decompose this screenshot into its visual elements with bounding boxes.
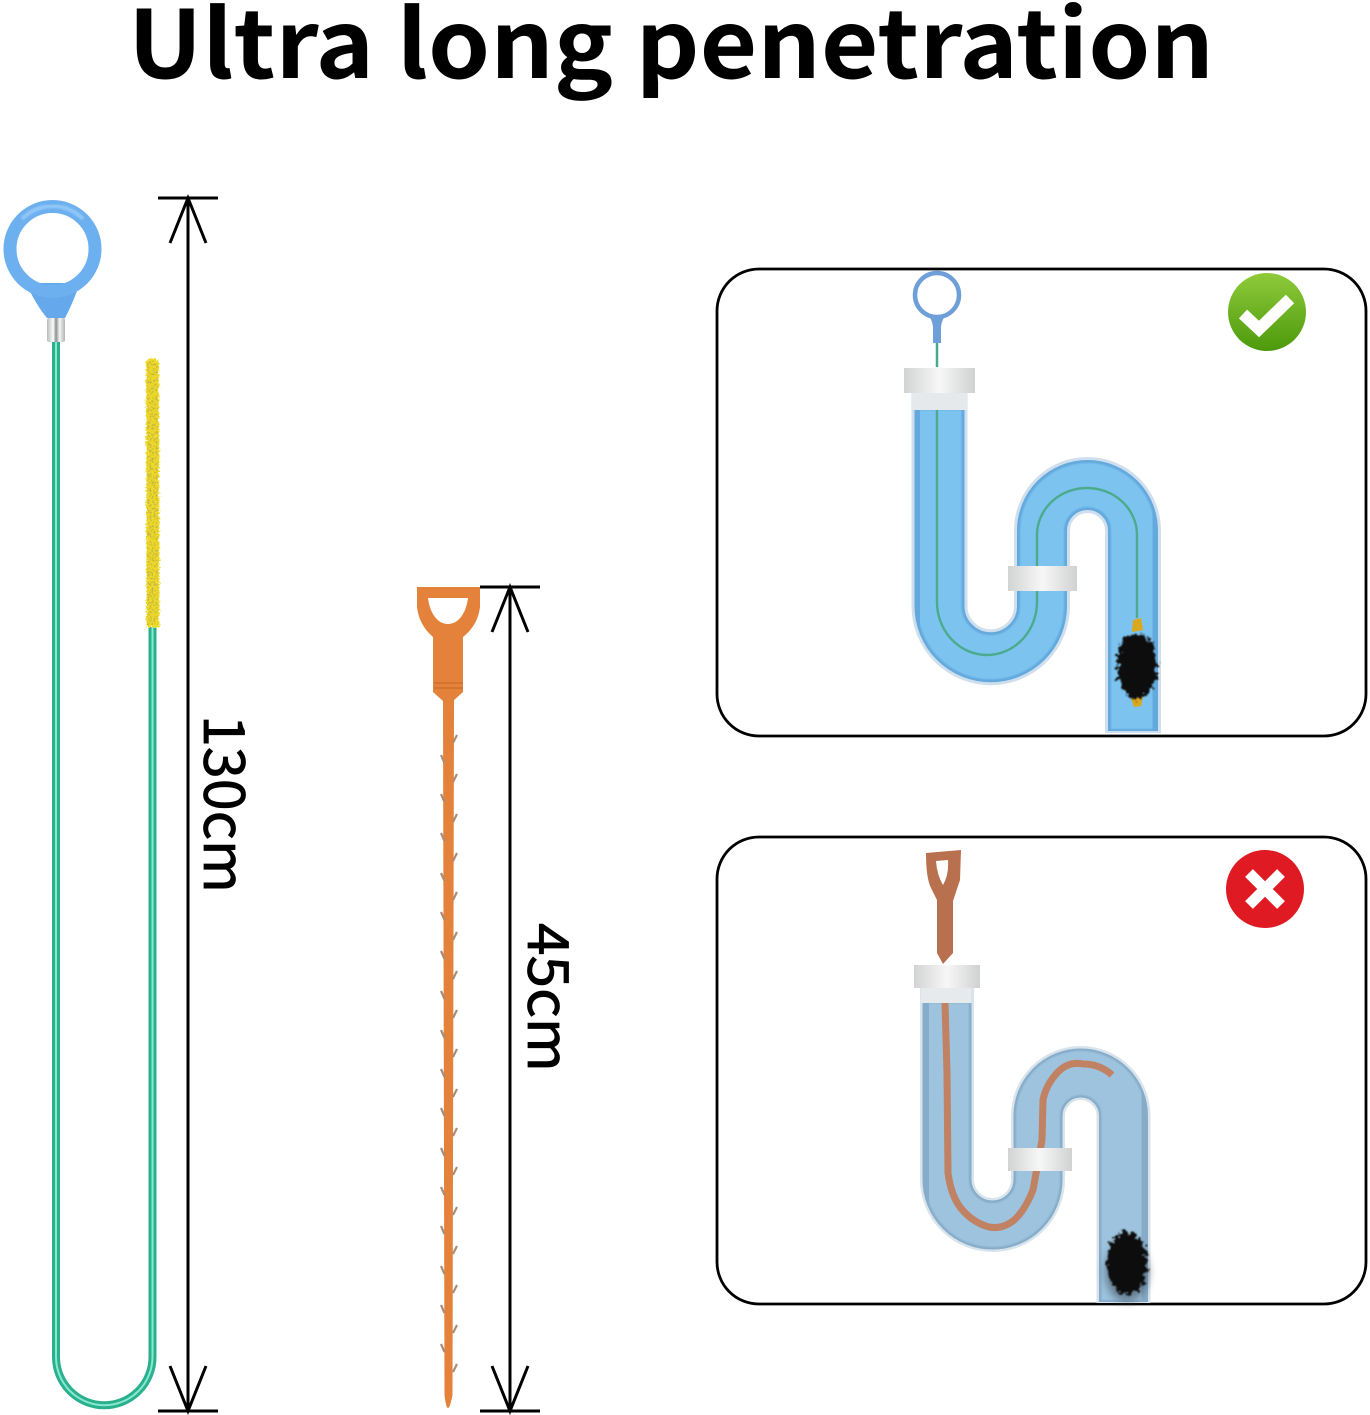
top cap <box>914 965 980 988</box>
panel frame <box>717 837 1366 1304</box>
long blue-ring drain tool <box>10 206 160 1405</box>
icon: green check <box>1228 273 1306 351</box>
icon: red cross <box>1226 850 1304 928</box>
handle <box>417 587 480 701</box>
panel frame <box>717 269 1366 736</box>
brown stem in pipe <box>945 1003 1112 1228</box>
yellow brush <box>146 358 160 627</box>
panel: incorrect use <box>717 837 1366 1304</box>
upper pipe collar <box>912 392 967 410</box>
S-trap pipe <box>940 392 1133 733</box>
hair clog with brush <box>1117 618 1157 707</box>
barbs <box>441 735 457 1372</box>
orange barbed drain tool <box>417 587 480 1408</box>
label: 45cm: 45cm <box>511 923 593 1072</box>
handle grip ridges <box>434 683 463 688</box>
hair clog <box>1105 1231 1149 1302</box>
small ring tool <box>915 273 959 367</box>
barbed stem <box>443 700 454 1408</box>
upper pipe collar <box>921 987 971 1003</box>
S-trap pipe <box>947 987 1124 1303</box>
ring handle <box>10 206 95 318</box>
dimension line: 45cm <box>480 587 540 1411</box>
dimension line: 130cm <box>158 198 218 1411</box>
panel: correct use <box>717 269 1366 736</box>
metal ferrule <box>47 318 65 342</box>
small brown handle <box>926 850 961 964</box>
wire highlight <box>56 342 152 1405</box>
label: 130cm: 130cm <box>187 715 269 893</box>
top cap <box>904 368 975 393</box>
tool wire <box>56 342 152 1405</box>
middle clamp <box>1008 1148 1072 1171</box>
green wire in pipe <box>937 410 1137 655</box>
middle clamp <box>1008 566 1077 591</box>
